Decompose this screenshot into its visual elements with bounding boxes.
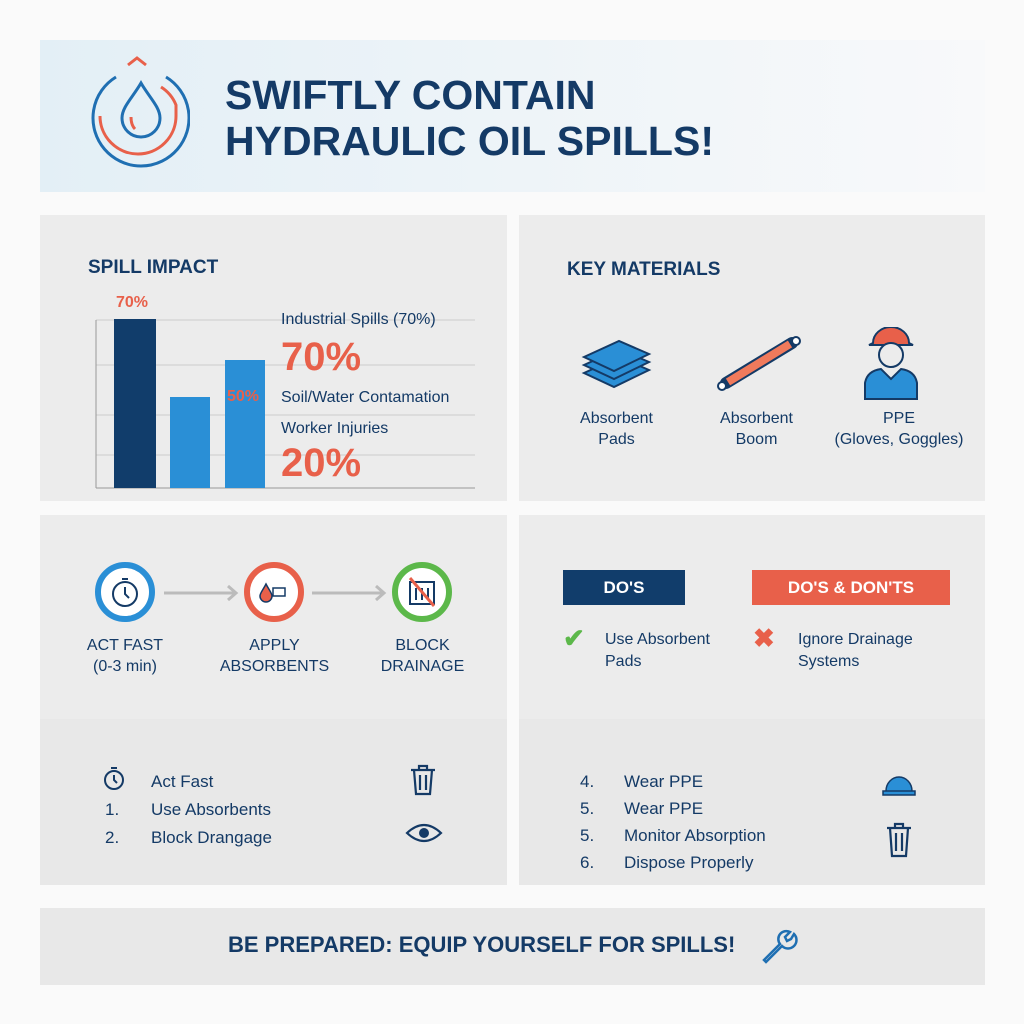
icon: PPE worker <box>864 327 918 400</box>
list: Wear PPE <box>624 772 703 791</box>
icon: timer <box>104 767 124 790</box>
heading: SPILL IMPACT <box>88 257 218 278</box>
icon: eye <box>406 824 442 842</box>
icon: stopwatch <box>95 562 155 622</box>
icon: trash <box>411 764 435 796</box>
bar chart <box>96 294 475 488</box>
list: 2. <box>105 828 119 847</box>
title <box>225 72 714 164</box>
bar chart: 70% <box>116 294 148 311</box>
list: Use Absorbents <box>151 800 271 819</box>
list: Block Drangage <box>151 828 272 847</box>
list <box>105 772 272 847</box>
dont item: ✖ <box>753 623 775 653</box>
dos header <box>563 570 685 605</box>
do item: ✔ <box>563 623 585 653</box>
panel: key materials: (Gloves, Goggles) <box>835 431 963 448</box>
icon: trash <box>887 822 911 858</box>
donts header <box>752 570 950 605</box>
panel: spill impact <box>40 215 507 501</box>
list: Monitor Absorption <box>624 826 766 845</box>
icon: absorbent boom <box>717 336 801 391</box>
panel: key materials: Absorbent <box>580 410 653 427</box>
panel: key materials: PPE <box>883 410 915 427</box>
icon: oil drop logo <box>92 56 190 168</box>
footer text: BE PREPARED: EQUIP YOURSELF FOR SPILLS! <box>228 932 735 957</box>
title: SWIFTLY CONTAIN <box>225 72 596 118</box>
panel: process steps: APPLY <box>249 637 300 654</box>
bar chart: 50% <box>227 388 259 405</box>
panel: spill impact: Worker Injuries <box>281 420 388 437</box>
panel: spill impact: 70% <box>281 335 361 379</box>
panel: process steps: BLOCK <box>395 637 450 654</box>
do item <box>563 623 710 670</box>
panel: dos and donts <box>519 515 985 719</box>
icon: wrench <box>762 930 798 964</box>
list: 5. <box>580 799 594 818</box>
footer banner <box>40 908 985 985</box>
step labels <box>87 637 163 675</box>
icon: absorbent pads <box>582 340 652 388</box>
donts header: DO'S & DON'TS <box>788 578 914 597</box>
arrow <box>312 585 386 601</box>
list: 4. <box>580 772 594 791</box>
panel: spill impact: Soil/Water Contamation <box>281 389 449 406</box>
panel: key materials: Absorbent <box>720 410 793 427</box>
panel: key materials: Pads <box>598 431 635 448</box>
chart labels: Industrial Spills (70%) <box>281 311 436 328</box>
step labels: (0-3 min) <box>93 658 157 675</box>
panel: steps list right <box>519 719 985 885</box>
title: HYDRAULIC OIL SPILLS! <box>225 118 714 164</box>
panel: process steps <box>40 515 507 719</box>
step labels: ACT FAST <box>87 637 163 654</box>
panel: key materials <box>519 215 985 501</box>
panel: steps list left <box>40 719 507 885</box>
panel: process steps: DRAINAGE <box>381 658 464 675</box>
list: Dispose Properly <box>624 853 753 872</box>
dont item: Ignore Drainage <box>798 631 913 648</box>
list: Act Fast <box>151 772 213 791</box>
icon: block drainage <box>392 562 452 622</box>
panel: process steps: ABSORBENTS <box>220 658 329 675</box>
icon: hard hat <box>882 776 916 796</box>
list: Wear PPE <box>624 799 703 818</box>
dont item <box>753 623 913 670</box>
dont item: Systems <box>798 653 859 670</box>
heading: KEY MATERIALS <box>567 259 720 280</box>
do item: Use Absorbent <box>605 631 710 648</box>
list <box>580 772 766 872</box>
icon: apply absorbents <box>244 562 304 622</box>
do item: Pads <box>605 653 641 670</box>
dos header: DO'S <box>604 578 644 597</box>
list: 5. <box>580 826 594 845</box>
panel: key materials: Boom <box>736 431 777 448</box>
panel: spill impact: 20% <box>281 441 361 485</box>
list: 6. <box>580 853 594 872</box>
list: 1. <box>105 800 119 819</box>
header banner <box>40 40 985 192</box>
arrow <box>164 585 238 601</box>
